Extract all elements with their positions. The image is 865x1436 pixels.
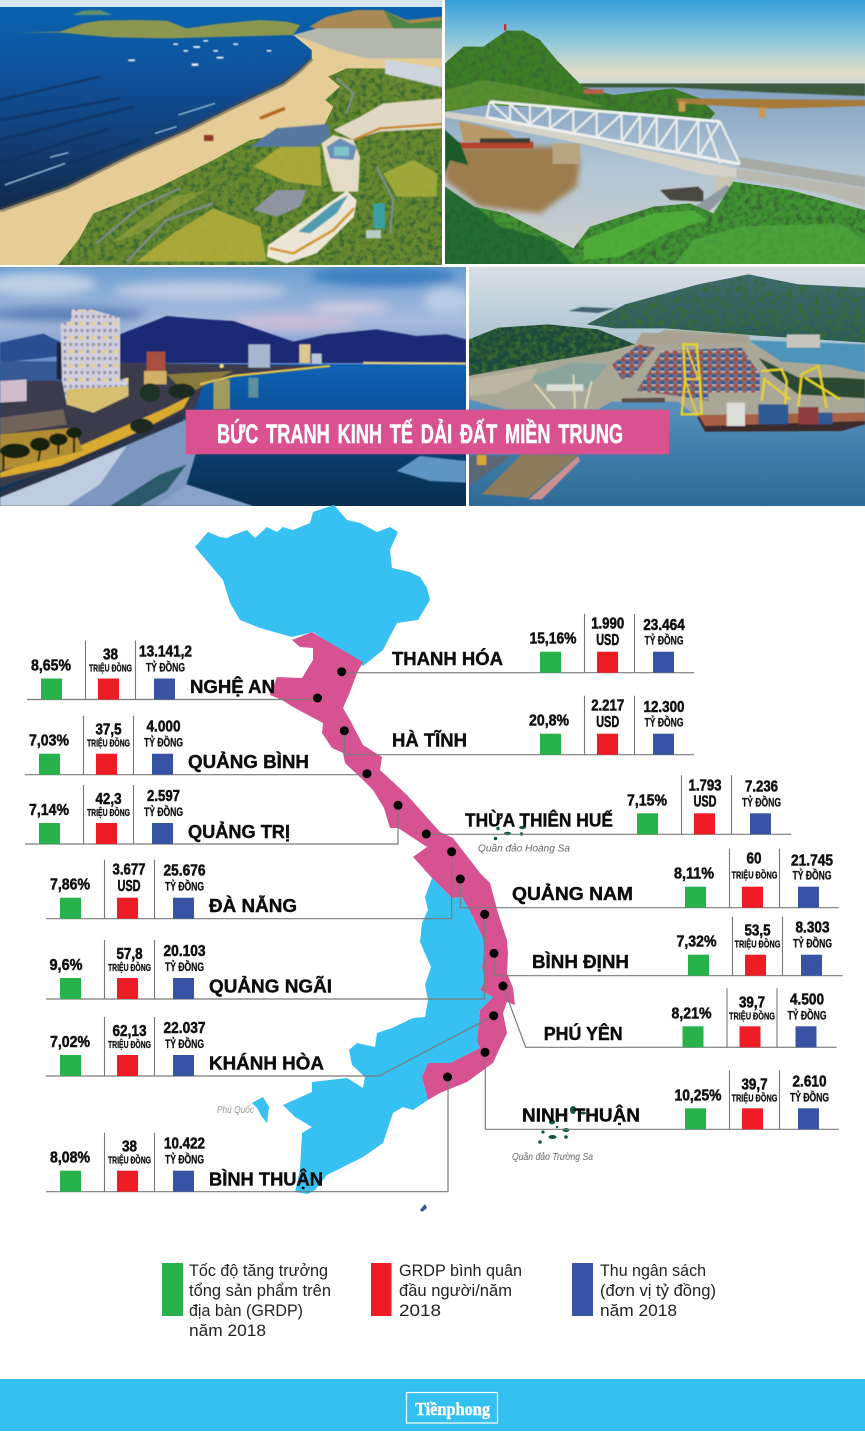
stat columns: 8.303	[796, 920, 830, 937]
stat columns: 7,15%	[627, 792, 667, 809]
stat columns: TỶ ĐỒNG	[788, 1007, 826, 1022]
province name: THỪA THIÊN HUẾ	[465, 810, 613, 831]
stat columns: 38	[122, 1139, 137, 1156]
stat columns: TRIỆU ĐỒNG	[87, 806, 130, 819]
stat columns: 3.677	[112, 862, 146, 879]
islands: Trường Sa	[538, 1106, 586, 1144]
province name: QUẢNG NGÃI	[209, 976, 332, 997]
stat columns: USD	[596, 632, 619, 649]
legend	[162, 1261, 716, 1340]
stat columns: TRIỆU ĐỒNG	[87, 737, 130, 750]
callout: Thanh Hóa	[337, 614, 694, 676]
stat columns: 8,08%	[50, 1150, 90, 1167]
stat columns: 23.464	[643, 617, 685, 634]
callout: Quảng Trị	[25, 785, 402, 844]
stat columns: 39,7	[742, 1076, 768, 1093]
stat columns: 7,03%	[29, 733, 69, 750]
legend item: growth rate: năm 2018	[189, 1321, 266, 1340]
stat columns	[29, 716, 183, 775]
stat columns: TRIỆU ĐỒNG	[729, 1009, 775, 1022]
map of Vietnam	[195, 505, 593, 1212]
stat columns	[29, 785, 183, 844]
stat columns	[31, 640, 192, 700]
stat columns: 25.676	[164, 863, 206, 880]
stat columns: 7,86%	[50, 877, 90, 894]
map: Phú Quốc island	[252, 1097, 269, 1123]
stat columns	[50, 1017, 206, 1076]
callout: Quảng Nam	[456, 849, 839, 908]
legend item: GRDP per capita: đầu người/năm	[399, 1281, 512, 1300]
legend item: budget revenue: năm 2018	[600, 1301, 677, 1320]
map: northern region	[195, 505, 430, 666]
stat columns: 20.103	[164, 943, 206, 960]
legend item: growth rate: Tốc độ tăng trưởng	[189, 1261, 328, 1280]
stat columns: 1.793	[688, 777, 722, 794]
callout: Hà Tĩnh	[340, 696, 694, 755]
stat columns	[676, 917, 832, 976]
stat columns: 53,5	[744, 923, 771, 940]
legend item: budget revenue	[572, 1261, 716, 1320]
province name: QUẢNG NAM	[512, 883, 633, 904]
stat columns	[50, 940, 206, 999]
stat columns: USD	[118, 878, 140, 895]
stat columns: TỶ ĐỒNG	[144, 735, 183, 750]
stat columns: TỶ ĐỒNG	[792, 868, 832, 883]
stat columns	[674, 1070, 829, 1129]
stat columns: TRIỆU ĐỒNG	[108, 1038, 151, 1051]
callout: Thừa Thiên Huế	[422, 775, 791, 838]
stat columns	[672, 988, 826, 1047]
callout: Ninh Thuận	[480, 1048, 839, 1129]
logo: Tiền Phong: Tiềnphong	[415, 1399, 490, 1419]
stat columns: TRIỆU ĐỒNG	[108, 1154, 151, 1167]
stat columns: TRIỆU ĐỒNG	[732, 1091, 778, 1104]
stat columns: TRIỆU ĐỒNG	[108, 961, 151, 974]
province name: HÀ TĨNH	[392, 730, 467, 751]
stat columns: TỶ ĐỒNG	[165, 1036, 204, 1051]
stat columns: USD	[694, 794, 716, 811]
stat columns: TRIỆU ĐỒNG	[732, 869, 778, 882]
callout: Khánh Hòa	[46, 1011, 498, 1076]
map: highlands and southern region	[283, 878, 493, 1194]
callout: Phú Yên	[498, 982, 837, 1047]
legend item: budget revenue: (đơn vị tỷ đồng)	[600, 1281, 716, 1300]
stat columns: 7,02%	[50, 1034, 90, 1051]
label: Trường Sa: Quần đảo Trường Sa	[512, 1151, 593, 1163]
stat columns: 38	[103, 646, 118, 664]
stat columns: 20,8%	[529, 713, 569, 730]
stat columns: 2.217	[591, 698, 624, 715]
label: Hoàng Sa: Quần đảo Hoàng Sa	[478, 842, 570, 854]
stat columns: 21.745	[791, 853, 833, 870]
stat columns: TỶ ĐỒNG	[165, 959, 204, 974]
stat columns: TỶ ĐỒNG	[790, 1089, 829, 1104]
callout: Đà Nẵng	[46, 847, 456, 919]
title banner	[186, 410, 669, 454]
stat columns: 42,3	[96, 791, 122, 808]
stat columns: 13.141,2	[139, 644, 192, 660]
province name: QUẢNG TRỊ	[188, 821, 290, 842]
stat columns: 12.300	[644, 699, 685, 716]
province name: NGHỆ AN	[190, 676, 275, 697]
stat columns: TỶ ĐỒNG	[165, 1152, 204, 1167]
stat columns: 10.422	[164, 1136, 205, 1153]
callout: Nghệ An	[27, 640, 322, 702]
stat columns: 39,7	[739, 994, 765, 1011]
legend item: GRDP per capita: 2018	[399, 1301, 441, 1320]
province name: BÌNH ĐỊNH	[532, 951, 629, 972]
stat columns: 9,6%	[50, 957, 83, 974]
stat columns	[50, 860, 206, 919]
islands: Hoàng Sa	[494, 826, 526, 840]
stat columns: 4.500	[790, 991, 824, 1008]
callout: Quảng Ngãi	[46, 910, 489, 999]
legend item: GRDP per capita: GRDP bình quân	[399, 1261, 522, 1280]
province name: ĐÀ NẴNG	[209, 895, 297, 916]
stat columns: TỶ ĐỒNG	[742, 794, 781, 809]
province name: QUẢNG BÌNH	[188, 751, 309, 772]
stat columns: 8,11%	[674, 866, 714, 883]
stat columns: 57,8	[116, 946, 143, 963]
stat columns: TỶ ĐỒNG	[644, 715, 684, 730]
stat columns: 1.990	[591, 616, 624, 633]
stat columns: 37,5	[96, 722, 122, 739]
stat columns: 8,65%	[31, 658, 71, 674]
stat columns: 7.236	[745, 778, 778, 795]
legend item: budget revenue: Thu ngân sách	[600, 1261, 706, 1280]
stat columns: TỶ ĐỒNG	[165, 879, 204, 894]
legend item: growth rate: tổng sản phẩm trên	[189, 1281, 331, 1300]
stat columns: 2.610	[792, 1073, 827, 1090]
stat columns: 8,21%	[672, 1005, 712, 1022]
province name: NINH THUẬN	[522, 1105, 640, 1126]
callout: Bình Thuận	[46, 1072, 452, 1192]
logo: Tiền Phong	[406, 1392, 498, 1423]
stat columns: TỶ ĐỒNG	[144, 804, 183, 819]
stat columns: 22.037	[164, 1020, 206, 1037]
stat columns: USD	[596, 714, 619, 731]
stat columns: 62,13	[112, 1023, 147, 1040]
stat columns: TỶ ĐỒNG	[793, 936, 832, 951]
stat columns	[530, 614, 685, 673]
map: Côn Đảo island	[420, 1204, 427, 1212]
footer bar	[0, 1379, 865, 1431]
stat columns	[627, 775, 781, 834]
title banner: BỨC TRANH KINH TẾ DẢI ĐẤT MIỀN TRUNG	[217, 417, 623, 449]
legend item: growth rate: địa bàn (GRDP)	[189, 1301, 303, 1320]
stat columns	[529, 696, 685, 755]
photo: coastal city at dusk	[0, 267, 466, 506]
province name: PHÚ YÊN	[544, 1023, 623, 1044]
callout: Quảng Bình	[25, 716, 372, 778]
photo: truss bridge over river	[445, 0, 865, 264]
photo: beach resort	[0, 0, 442, 265]
stat columns: TỶ ĐỒNG	[146, 660, 185, 674]
legend item: GRDP per capita	[371, 1261, 522, 1320]
photo: container port	[469, 267, 865, 506]
legend item: growth rate	[162, 1261, 331, 1340]
stat columns: 2.597	[147, 788, 180, 805]
stat columns	[50, 1133, 205, 1192]
stat columns: 7,32%	[676, 934, 717, 951]
province name: BÌNH THUẬN	[209, 1169, 323, 1190]
stat columns	[674, 849, 833, 908]
stat columns: 60	[746, 851, 762, 868]
province name: THANH HÓA	[392, 648, 503, 669]
label: Phú Quốc: Phú Quốc	[217, 1104, 255, 1116]
stat columns: TRIỆU ĐỒNG	[734, 938, 780, 951]
stat columns: 15,16%	[530, 631, 577, 648]
stat columns: 4.000	[146, 719, 181, 736]
map: central coast provinces	[270, 632, 515, 1100]
stat columns: 7,14%	[29, 802, 69, 819]
stat columns: 10,25%	[674, 1087, 722, 1104]
stat columns: TRIỆU ĐỒNG	[89, 662, 132, 674]
province name: KHÁNH HÒA	[209, 1053, 324, 1074]
callout: Bình Định	[490, 917, 843, 976]
stat columns: TỶ ĐỒNG	[644, 633, 684, 648]
